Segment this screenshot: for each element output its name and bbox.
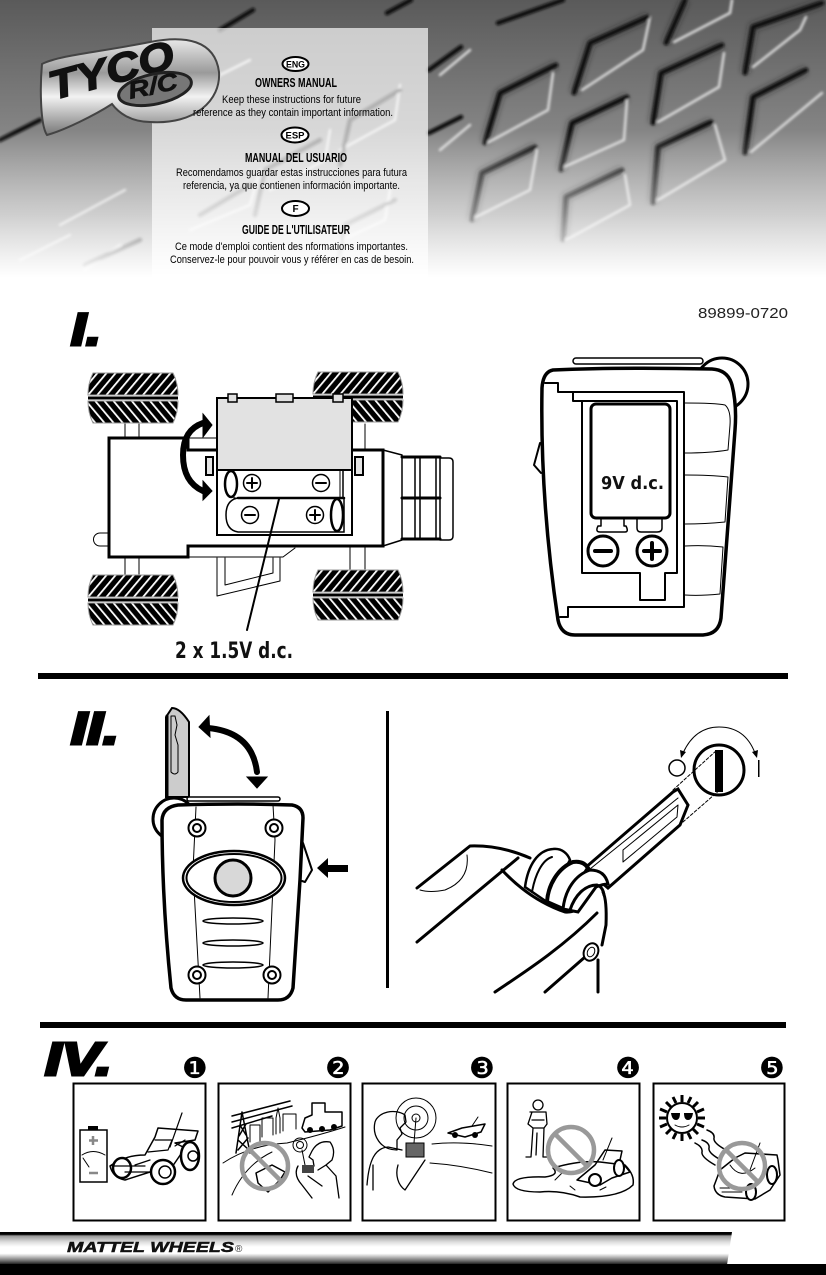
section heading I: I. — [71, 304, 101, 355]
battery compartment — [217, 470, 352, 535]
button — [215, 860, 251, 896]
vents — [203, 918, 263, 968]
arrow: open and close door — [183, 414, 212, 500]
label: 9V d.c.: 9V d.c. — [601, 473, 664, 494]
antenna insertion detail — [417, 727, 760, 992]
prohibition sign — [548, 1127, 594, 1173]
footer text: Mattel Wheels: ® — [235, 1244, 243, 1255]
part number: 89899-0720 — [698, 305, 788, 322]
icon: small car — [448, 1124, 485, 1138]
rotation arrow — [680, 727, 758, 758]
tire: bottom right — [313, 570, 403, 620]
icon: man with controller — [367, 1111, 425, 1190]
language block: English: ENG — [286, 60, 305, 70]
side clip — [534, 443, 541, 473]
body right edge — [598, 892, 606, 992]
plus symbol — [637, 536, 667, 566]
icon: car — [110, 1113, 199, 1184]
icon: truck — [302, 1103, 342, 1133]
section heading II: II. — [71, 703, 119, 754]
remote control: battery side — [534, 358, 748, 635]
front bumper — [383, 450, 453, 546]
panel 1: charged battery and car — [74, 1084, 206, 1220]
panel 2: avoid power lines and traffic — [218, 1084, 350, 1220]
divider: section I — [38, 673, 788, 679]
axles and nub — [94, 424, 365, 574]
remote outline — [542, 368, 736, 635]
icon: city — [250, 1108, 296, 1142]
antenna bar — [187, 797, 280, 801]
tire: top right — [313, 372, 403, 422]
antenna knob — [696, 358, 748, 410]
icon: sun rays — [695, 1130, 726, 1165]
screws — [188, 820, 282, 984]
instruction text panel — [152, 28, 428, 282]
minus symbol — [588, 536, 618, 566]
language block: French: Ce mode d'emploi contient des nformations importantes. — [175, 241, 408, 253]
language block: French: GUIDE DE L'UTILISATEUR — [242, 222, 350, 237]
tire: bottom left — [88, 575, 178, 625]
tire: top left — [88, 373, 178, 423]
step number 1: ❶ — [182, 1051, 208, 1085]
remote outline — [162, 804, 303, 1000]
battery door — [217, 394, 352, 470]
icon: sun with sunglasses — [659, 1095, 705, 1141]
language block: French: F — [292, 204, 299, 215]
language block: Spanish: Recomendamos guardar estas instrucciones para futura — [176, 167, 408, 179]
icon: man with controller — [293, 1138, 339, 1198]
panel 3: clear line of sight — [362, 1084, 496, 1220]
arrow: raise antenna — [199, 716, 267, 788]
icon: small car — [256, 1165, 285, 1192]
logo: Tyco R/C: TYCO — [44, 33, 179, 109]
panel 5: avoid direct sun — [654, 1084, 784, 1220]
knob — [153, 798, 195, 840]
language block: Spanish: referencia, ya que contienen información importante. — [183, 180, 400, 192]
language block: French: Conservez-le pour pouvoir vous y référer en cas de besoin. — [170, 254, 414, 266]
side tabs — [206, 457, 363, 475]
outer compartment line — [545, 383, 684, 617]
car top view with battery compartment — [88, 372, 453, 625]
language block: English: OWNERS MANUAL — [255, 75, 337, 90]
section heading IV: IV. — [45, 1033, 112, 1085]
language block: Spanish: MANUAL DEL USUARIO — [245, 150, 347, 165]
language block: French — [170, 201, 414, 266]
language block: English — [193, 57, 393, 119]
prohibition sign — [242, 1143, 288, 1189]
footer text: Mattel Wheels: MATTEL WHEELS — [67, 1239, 234, 1256]
step number 2: ❷ — [325, 1051, 351, 1085]
inner compartment line — [573, 392, 677, 600]
panel 4: avoid water — [508, 1084, 640, 1220]
icon: car — [714, 1143, 780, 1200]
label: 2 x 1.5V d.c.: 2 x 1.5V d.c. — [175, 639, 293, 664]
ignition dial — [673, 745, 744, 822]
arrow: press switch — [317, 858, 348, 878]
chassis body — [109, 438, 383, 557]
finger nail — [420, 855, 467, 892]
on symbol — [758, 760, 760, 777]
logo: Tyco R/C: R/C — [126, 68, 181, 105]
ground lines — [430, 1117, 492, 1173]
antenna key — [166, 708, 189, 797]
9V battery — [591, 404, 670, 518]
icon: car in water — [555, 1138, 630, 1190]
language block: Spanish: ESP — [286, 130, 304, 140]
logo: Tyco R/C — [41, 33, 219, 135]
divider: section II — [40, 1022, 786, 1028]
footer band — [0, 1232, 826, 1275]
rear chassis detail — [188, 438, 295, 596]
road — [223, 1127, 345, 1195]
screw — [581, 941, 601, 963]
icon: man — [526, 1100, 548, 1157]
icon: pylon — [232, 1101, 292, 1153]
icon: battery — [80, 1126, 107, 1182]
battery top — [225, 470, 343, 503]
off symbol — [669, 760, 685, 776]
step number 5: ❺ — [759, 1051, 785, 1085]
grip ridges — [685, 403, 730, 595]
language block: Spanish — [176, 128, 408, 192]
leader line to batteries — [247, 499, 279, 630]
remote control: front with antenna — [153, 708, 312, 1000]
icon: puddle — [513, 1162, 633, 1197]
prohibition sign — [719, 1143, 765, 1189]
language block: English: Keep these instructions for future — [222, 94, 361, 106]
antenna bar — [573, 358, 703, 364]
seam lines — [193, 805, 275, 998]
side clip — [302, 843, 312, 882]
battery bottom — [226, 498, 344, 532]
icon: signal rings — [396, 1098, 436, 1138]
header background with tread pattern — [0, 0, 826, 282]
language block: English: reference as they contain important information. — [193, 107, 393, 119]
terminals — [597, 518, 662, 532]
key blade — [585, 789, 688, 888]
collar rings — [525, 849, 608, 912]
vertical divider — [386, 711, 389, 988]
step number 3: ❸ — [469, 1051, 495, 1085]
button surround — [183, 851, 285, 905]
icon: controller — [406, 1118, 424, 1157]
step number 4: ❹ — [615, 1051, 641, 1085]
hand and body — [417, 846, 597, 992]
